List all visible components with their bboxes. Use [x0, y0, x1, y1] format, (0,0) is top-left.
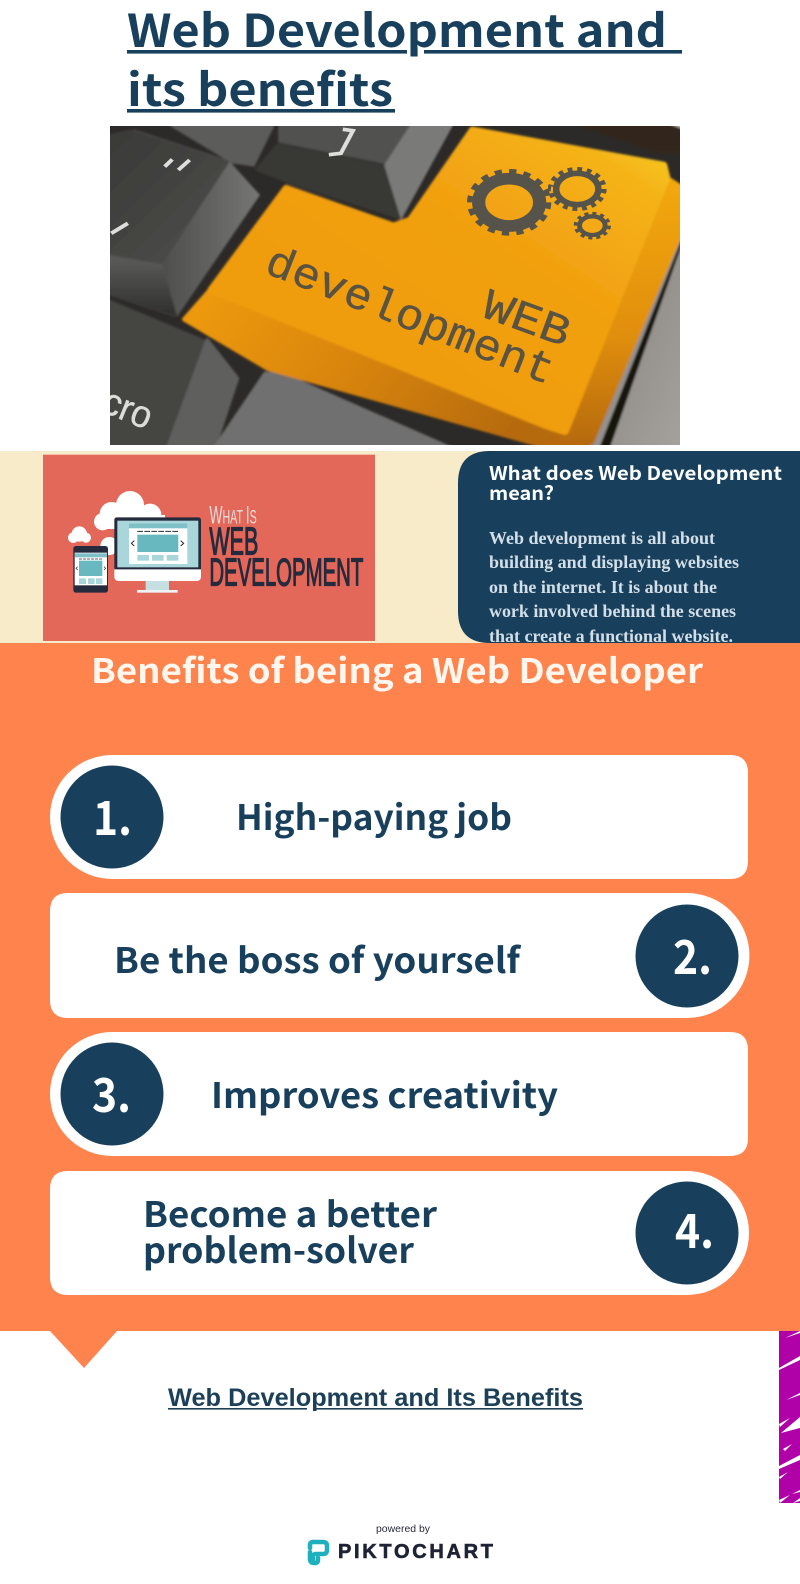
benefit 1: High-paying job [236, 790, 512, 841]
panel body text: that create a functional website. [489, 626, 733, 646]
key label: WEB: WEB [475, 282, 577, 360]
illustration text [209, 502, 363, 595]
photo: web development keyboard key [110, 126, 680, 445]
benefit 4: Become a better [143, 1187, 438, 1238]
benefit 4 [50, 1171, 749, 1295]
heading: benefits: Benefits of being a Web Developer [91, 644, 703, 693]
panel body text: Web development is all about [489, 528, 715, 548]
panel body text: on the internet. It is about the [489, 577, 717, 597]
icon: small gear [576, 214, 609, 238]
illustration text: WHAT IS [209, 502, 257, 530]
icon: clouds [68, 491, 165, 555]
icon: tablet [73, 546, 108, 593]
panel heading: What does Web Development [489, 459, 782, 486]
benefit 1 [50, 755, 748, 879]
benefit 4: problem-solver [143, 1223, 415, 1274]
title [127, 0, 682, 119]
cream band [0, 451, 800, 643]
benefit 3: 3. [92, 1057, 131, 1126]
panel: benefits background [0, 643, 800, 1368]
benefit 3 [50, 1032, 748, 1156]
key legends [111, 129, 353, 233]
powered by label: powered by [376, 1523, 431, 1535]
panel body text: work involved behind the scenes [489, 601, 736, 621]
illustration: What Is Web Development [43, 455, 375, 641]
benefit 2 [50, 893, 749, 1018]
panel body text: building and displaying websites [489, 552, 739, 572]
benefit 2: Be the boss of yourself [114, 933, 522, 984]
panel: what does web development mean [458, 451, 800, 646]
key label: development: development [258, 239, 561, 398]
benefit 2: 2. [673, 919, 712, 988]
key label: cro: cro [97, 380, 159, 438]
illustration text: WEB [209, 519, 258, 563]
benefit 4: 4. [675, 1193, 714, 1262]
purple textured strip [779, 1331, 800, 1503]
panel heading: mean? [489, 479, 554, 506]
panel body text [489, 528, 739, 646]
icon: large gear [472, 173, 547, 232]
illustration text: DEVELOPMENT [209, 551, 363, 595]
footer title: Web Development and Its Benefits [168, 1384, 583, 1412]
title: its benefits [127, 54, 393, 119]
panel heading [489, 459, 782, 506]
icon: medium gear [551, 170, 604, 208]
icon: piktochart mark [310, 1542, 327, 1563]
piktochart logo: PIKTOCHART [338, 1541, 493, 1563]
benefit 1: 1. [93, 780, 132, 849]
benefit 3: Improves creativity [211, 1068, 558, 1119]
icon: monitor [114, 517, 201, 593]
